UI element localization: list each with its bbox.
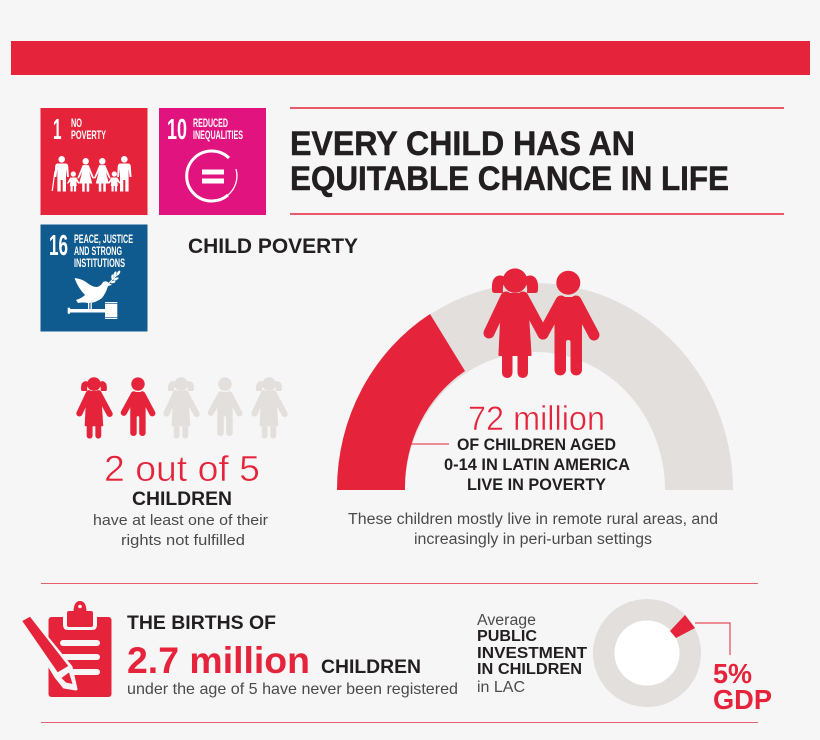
callout: 72 million xyxy=(408,400,630,494)
text: rural note xyxy=(348,511,718,548)
SDG badge 1: no poverty: NO xyxy=(71,118,82,130)
SDG badge 16: peace, justice and strong institutions: INSTITUTIONS xyxy=(74,258,125,270)
icon: clipboard and pencil xyxy=(22,601,111,697)
callout: 72 million: 72 million xyxy=(468,400,605,438)
stat: 2 out of 5: 2 out of 5 xyxy=(104,448,260,489)
headline block: EQUITABLE CHANCE IN LIFE xyxy=(290,160,729,198)
headline block: EVERY CHILD HAS AN xyxy=(290,125,635,163)
stat: births not registered: under the age of 5 have never been registered xyxy=(127,681,458,698)
stat: 5% GDP: 5% xyxy=(713,658,752,689)
icon: two children holding hands xyxy=(489,268,594,378)
stat: 2 out of 5 xyxy=(93,448,268,549)
headline block xyxy=(290,108,784,214)
text: public investment: IN CHILDREN xyxy=(477,661,582,678)
SDG badge 1: no poverty: POVERTY xyxy=(71,130,106,142)
section heading: CHILD POVERTY xyxy=(188,235,358,258)
icon: family xyxy=(52,156,132,192)
stat: births not registered: 2.7 million xyxy=(127,640,310,681)
SDG badge 1: no poverty: 1 xyxy=(53,114,62,146)
callout: 72 million: OF CHILDREN AGED xyxy=(457,436,616,454)
SDG badge 10: reduced inequalities: REDUCED xyxy=(193,118,228,130)
callout: 72 million: LIVE IN POVERTY xyxy=(467,476,606,494)
SDG badge 16: peace, justice and strong institutions: AND STRONG xyxy=(74,246,122,258)
chart: half-ring 72 million xyxy=(337,283,733,490)
SDG badge 10: reduced inequalities: 10 xyxy=(167,114,187,146)
SDG badge 16: peace, justice and strong institutions: 16 xyxy=(49,230,68,262)
text: rural note: increasingly in peri-urban settings xyxy=(414,531,652,548)
chart: donut 5% GDP xyxy=(604,610,730,696)
SDG badge 10: reduced inequalities: INEQUALITIES xyxy=(193,130,243,142)
stat: births not registered xyxy=(127,613,458,698)
SDG badge 16: peace, justice and strong institutions: PEACE, JUSTICE xyxy=(74,234,133,246)
stat: 5% GDP xyxy=(713,658,772,715)
stat: births not registered: CHILDREN xyxy=(321,657,421,678)
SDG badge 10: reduced inequalities xyxy=(159,108,266,215)
text: public investment: Average xyxy=(477,612,536,629)
text: public investment: INVESTMENT xyxy=(477,645,587,662)
SDG badge 1: no poverty xyxy=(40,108,148,215)
text: rural note: These children mostly live in remote rural areas, and xyxy=(348,511,718,528)
stat: 2 out of 5: rights not fulfilled xyxy=(121,532,245,549)
stat: 2 out of 5: have at least one of their xyxy=(93,512,268,529)
SDG badge 16: peace, justice and strong institutions xyxy=(40,224,148,332)
callout: 72 million: 0-14 IN LATIN AMERICA xyxy=(444,456,630,474)
stat: births not registered: THE BIRTHS OF xyxy=(127,613,276,634)
text: public investment: in LAC xyxy=(477,679,525,696)
text: public investment xyxy=(477,612,587,696)
icon: dove and gavel xyxy=(68,270,121,319)
icon: equality circle xyxy=(187,151,237,201)
stat: 5% GDP: GDP xyxy=(713,684,772,715)
icon row: 2 of 5 children xyxy=(79,377,285,439)
top banner xyxy=(11,41,810,75)
text: public investment: PUBLIC xyxy=(477,628,537,645)
stat: 2 out of 5: CHILDREN xyxy=(132,489,232,510)
